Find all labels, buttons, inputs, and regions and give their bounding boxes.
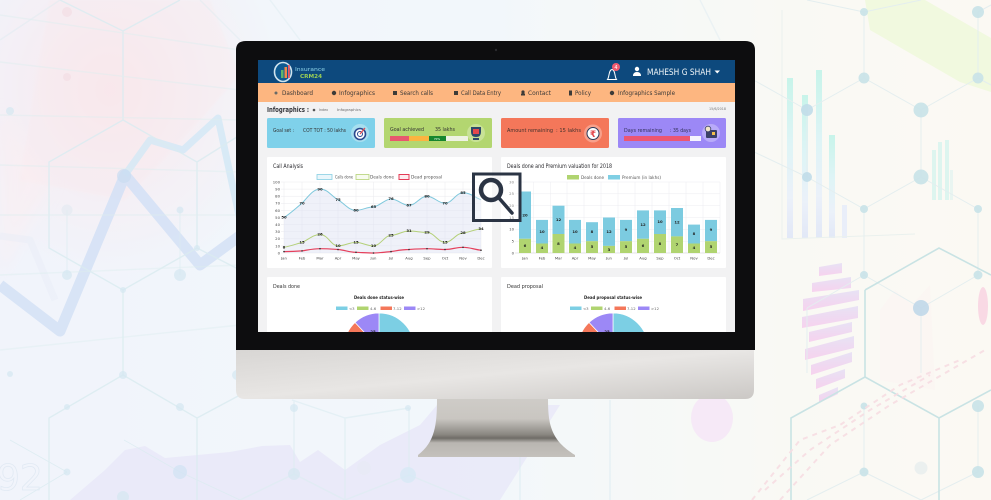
y axis labels xyxy=(509,181,514,254)
x axis labels: Jan xyxy=(280,256,288,260)
x axis labels: Sep xyxy=(423,256,431,260)
y axis labels: 25 xyxy=(509,191,515,196)
data labels: 4 xyxy=(693,245,696,250)
line: calls done xyxy=(284,189,481,218)
line: dead proposal xyxy=(284,247,481,253)
data labels: 6 xyxy=(642,243,645,248)
card: amount remaining: Amount remaining xyxy=(507,128,553,134)
y axis labels: 80 xyxy=(275,194,281,198)
page heading and breadcrumb xyxy=(268,106,726,114)
logo text: CRM24 xyxy=(300,74,322,80)
x axis labels: Aug xyxy=(405,256,413,260)
pie legend: <3 xyxy=(583,306,589,311)
y axis labels: 5 xyxy=(512,238,515,244)
bars: premium xyxy=(519,192,717,246)
data labels: 15 xyxy=(299,240,305,244)
card: goal set xyxy=(267,118,375,148)
icon: trophy xyxy=(467,124,485,142)
navigation bar xyxy=(258,83,735,102)
bell icon with badge xyxy=(608,63,620,80)
logo text: Insurance xyxy=(295,67,326,73)
x axis labels: Jun xyxy=(605,256,613,260)
bell icon with badge: 4 xyxy=(614,65,618,71)
background: pink dots chart xyxy=(752,350,985,500)
data labels: 85 xyxy=(460,190,466,195)
pie chart: 25 xyxy=(370,329,376,334)
x axis labels: Dec xyxy=(477,256,485,260)
data labels: 8 xyxy=(557,241,560,246)
data labels: 10 xyxy=(572,229,578,234)
x axis labels: May xyxy=(352,256,361,260)
data labels: 31 xyxy=(406,228,412,233)
panel: deals done pie: Deals done xyxy=(273,284,300,290)
card: goal achieved: Goal achieved xyxy=(390,127,424,133)
pie legend: 4-6 xyxy=(370,306,377,311)
bars: deals done xyxy=(519,234,717,253)
x axis labels: Mar xyxy=(316,256,324,260)
pie legend xyxy=(570,306,660,311)
panel: deals done and premium valuation: Deals done and Premium valuation for 2018 xyxy=(507,164,612,170)
data labels: 15 xyxy=(442,240,448,244)
dashboard screen xyxy=(258,60,735,348)
background: hexagon nodes right xyxy=(801,6,984,478)
x axis labels: Oct xyxy=(442,256,449,260)
data labels: 15 xyxy=(353,240,359,244)
card: goal set: COT TOT : 50 lakhs xyxy=(303,128,346,134)
y axis labels: 60 xyxy=(275,208,281,213)
data labels: 8 xyxy=(283,244,286,250)
y axis labels: 0 xyxy=(512,250,515,256)
camera xyxy=(495,49,497,51)
x axis labels xyxy=(280,257,484,260)
data labels: 80 xyxy=(424,194,430,198)
y axis labels: 30 xyxy=(509,180,515,184)
card: goal set: Goal set : xyxy=(273,128,294,134)
monitor stand xyxy=(418,398,575,457)
data labels: 12 xyxy=(606,229,612,234)
user name: MAHESH G SHAH xyxy=(647,68,711,78)
navigation bar: Infographics Sample xyxy=(618,90,675,97)
data labels: 8 xyxy=(659,241,662,246)
data labels: 5 xyxy=(591,244,594,249)
data labels: 5 xyxy=(625,244,628,249)
chart legend: Deals done xyxy=(581,175,604,181)
data labels: 26 xyxy=(317,232,323,236)
pie legend: 7-12 xyxy=(393,306,402,311)
pie legend: >12 xyxy=(651,306,660,311)
icon: target xyxy=(351,124,369,142)
data labels: 4 xyxy=(541,245,544,250)
data labels: 70 xyxy=(299,200,305,206)
y axis labels: 40 xyxy=(275,222,281,227)
data labels: 6 xyxy=(524,243,527,248)
data labels: 50 xyxy=(281,214,287,220)
icon: calendar xyxy=(702,124,720,142)
panel: deals done pie xyxy=(267,277,492,332)
data labels: 29 xyxy=(424,230,430,234)
navigation bar: Call Data Entry xyxy=(461,90,501,97)
line chart xyxy=(273,180,485,260)
x axis labels: Jul xyxy=(388,256,393,260)
top header bar xyxy=(258,60,735,83)
data labels: 10 xyxy=(371,243,376,248)
icon: magnifying glass xyxy=(474,174,520,220)
pie chart xyxy=(344,313,414,348)
data labels: 34 xyxy=(478,226,484,231)
background: bar chart right xyxy=(782,10,953,239)
chart legend xyxy=(567,175,661,180)
navigation bar: Dashboard xyxy=(282,90,313,97)
data labels: 12 xyxy=(674,220,680,224)
data labels xyxy=(522,212,713,252)
data labels: 76 xyxy=(388,196,394,201)
x axis labels: Feb xyxy=(299,256,306,260)
page heading and breadcrumb: Infographics xyxy=(337,107,361,112)
monitor xyxy=(236,41,755,457)
panel: dead proposal pie: Dead proposal xyxy=(507,284,543,290)
navigation bar: Contact xyxy=(528,90,552,97)
background: pink horizontal bars xyxy=(802,263,859,403)
y axis labels: 30 xyxy=(275,229,281,234)
y axis labels: 20 xyxy=(275,236,281,241)
data labels: 9 xyxy=(625,227,628,232)
data labels: 25 xyxy=(388,232,394,238)
x axis labels: Dec xyxy=(707,256,715,260)
data labels: 8 xyxy=(591,229,594,234)
page heading and breadcrumb: 15/6/2018 xyxy=(709,107,726,111)
data labels: 5 xyxy=(710,244,713,249)
y axis labels: 90 xyxy=(275,186,281,192)
stacked bar chart xyxy=(509,180,720,260)
card: days remaining: : 35 days xyxy=(670,128,691,134)
logo xyxy=(274,62,292,82)
background: pale pink area chart xyxy=(880,285,935,390)
pie legend: 4-6 xyxy=(604,306,611,311)
background: hexagon grid left xyxy=(0,0,720,500)
panel: dead proposal pie: Dead proposal status-wise xyxy=(584,295,642,301)
background: hexagon grid right xyxy=(750,0,991,500)
panel: call analysis xyxy=(267,157,492,268)
data labels: 12 xyxy=(556,217,561,222)
data labels: 9 xyxy=(710,227,713,232)
y axis labels: 50 xyxy=(275,215,281,220)
card: goal achieved xyxy=(384,118,492,148)
pie legend: 7-12 xyxy=(627,306,636,311)
y axis labels: 0 xyxy=(278,250,281,256)
user icon xyxy=(633,67,641,76)
data labels: 12 xyxy=(640,222,646,227)
data labels: 28 xyxy=(460,230,466,235)
chart legend xyxy=(317,174,442,180)
x axis labels: Nov xyxy=(690,256,698,260)
chart legend: Premium (in lakhs) xyxy=(622,175,661,181)
icon: rupee: ₹ xyxy=(590,130,596,140)
data points xyxy=(283,246,482,254)
data labels: 67 xyxy=(406,202,412,208)
y axis labels: 70 xyxy=(275,200,281,206)
y axis labels: 10 xyxy=(275,244,281,248)
card: amount remaining: : 15 lakhs xyxy=(556,128,581,134)
y axis labels: 20 xyxy=(509,203,515,208)
panel: deals done and premium valuation xyxy=(501,157,726,268)
data labels: 10 xyxy=(539,229,545,234)
monitor chin xyxy=(236,350,754,399)
card: amount remaining xyxy=(501,118,609,148)
pie legend xyxy=(336,306,426,311)
navigation bar: Infographics xyxy=(339,90,375,97)
x axis labels: Oct xyxy=(674,256,681,260)
panel: dead proposal pie xyxy=(501,277,726,348)
data labels: 90 xyxy=(317,186,323,192)
background: hexagon nodes left xyxy=(6,7,416,500)
background: pink oval xyxy=(978,287,988,325)
card: days remaining: Days remaining xyxy=(624,128,662,134)
data labels: 70 xyxy=(442,200,448,206)
page heading and breadcrumb: Index xyxy=(319,107,329,112)
data labels: 10 xyxy=(657,219,663,224)
data labels: 65 xyxy=(371,204,376,209)
x axis labels: Mar xyxy=(555,256,563,260)
x axis labels: Nov xyxy=(459,256,467,260)
data labels: 20 xyxy=(522,212,528,218)
monitor bezel xyxy=(236,41,755,350)
page heading and breadcrumb: Infographics : xyxy=(267,106,309,114)
pie legend: <3 xyxy=(349,306,355,311)
navigation bar: Policy xyxy=(575,90,591,97)
pie chart xyxy=(578,313,648,348)
x axis labels: Jun xyxy=(370,256,377,260)
background: blue line chart xyxy=(0,118,245,331)
data labels: 7 xyxy=(676,242,679,247)
data labels: 4 xyxy=(574,245,577,250)
card: goal achieved: 35 lakhs xyxy=(435,127,455,133)
x axis labels xyxy=(522,257,714,260)
panel: call analysis: Call Analysis xyxy=(273,164,303,170)
pie legend: >12 xyxy=(417,306,426,311)
data labels: 10 xyxy=(335,243,341,248)
data labels: 60 xyxy=(353,208,359,212)
logo text xyxy=(296,67,325,78)
y axis labels: 100 xyxy=(273,180,281,184)
y axis labels: 10 xyxy=(509,226,515,232)
data labels: 75 xyxy=(335,197,341,202)
data labels: 3 xyxy=(608,247,611,252)
x axis labels: Jan xyxy=(521,256,529,260)
background: lavender pie xyxy=(691,394,733,442)
y axis labels xyxy=(273,181,280,254)
chart legend: Deals done xyxy=(370,174,394,180)
background: purple mountain chart xyxy=(70,405,560,500)
y axis labels: 15 xyxy=(509,215,515,220)
x axis labels: Apr xyxy=(572,256,579,260)
chart legend: Calls done xyxy=(335,174,353,180)
caret xyxy=(714,70,720,74)
x axis labels: Aug xyxy=(639,256,647,260)
chart legend: Dead proposal xyxy=(411,174,442,180)
panel: deals done pie: Deals done status-wise xyxy=(354,295,404,301)
x axis labels: Apr xyxy=(335,256,342,260)
card: days remaining xyxy=(618,118,726,148)
data labels xyxy=(281,186,484,250)
x axis labels: Feb xyxy=(539,256,546,260)
data labels: 8 xyxy=(693,231,696,236)
background: green stripe xyxy=(865,0,991,92)
line: deals done xyxy=(284,229,481,247)
x axis labels: Sep xyxy=(656,256,664,260)
area: calls done xyxy=(284,189,481,253)
navigation bar: Search calls xyxy=(400,90,433,97)
pie chart: 25 xyxy=(604,329,610,334)
x axis labels: May xyxy=(588,256,597,260)
x axis labels: Jul xyxy=(623,256,628,260)
progress bar: 70% xyxy=(434,137,440,141)
progress bar xyxy=(624,136,701,141)
